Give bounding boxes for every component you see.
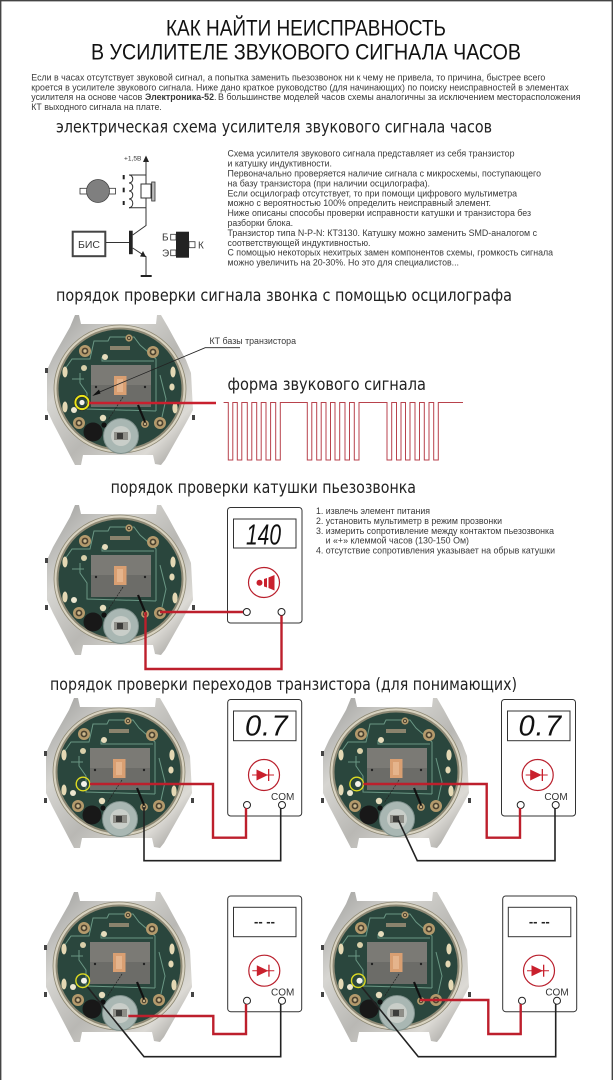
intro text block: . <box>214 92 216 102</box>
circuit description text: Ниже описаны способы проверки исправности катушки и транзистора без <box>228 208 531 218</box>
multimeter 0.7: . <box>536 711 544 743</box>
heading: coil check: порядок проверки катушки пьезозвонка <box>111 478 416 497</box>
title: КАК НАЙТИ НЕИСПРАВНОСТЬ <box>166 16 446 41</box>
multimeter no reading: COM <box>545 988 569 999</box>
watch 6 <box>321 892 471 1042</box>
heading: circuit diagram: электрическая схема усилителя звукового сигнала часов <box>56 118 492 137</box>
title: В УСИЛИТЕЛЕ ЗВУКОВОГО СИГНАЛА ЧАСОВ <box>91 39 521 64</box>
circuit schematic: Э <box>162 249 169 260</box>
circuit description text: на базу транзистора (при наличии осцилографа). <box>228 178 430 188</box>
panel: junction test bottom left <box>44 892 302 1057</box>
intro text block: КТ выходного сигнала на плате. <box>31 102 162 112</box>
circuit schematic: Б <box>162 233 169 244</box>
multimeter no reading <box>503 896 577 1012</box>
watch 4 <box>321 698 471 848</box>
coil check instructions: 1. извлечь элемент питания <box>316 506 430 516</box>
intro text block: кроется в усилителе звукового сигнала. Ниже дано краткое руководство (для начинающих) по поиску неисправностей в элементах <box>31 82 569 92</box>
coil check instructions: и «+» клеммой часов (130-150 Ом) <box>326 536 469 546</box>
panel: junction test bottom right <box>321 892 577 1057</box>
watch 5 <box>44 892 194 1042</box>
coil check instructions: 4. отсутствие сопротивления указывает на обрыв катушки <box>316 546 555 556</box>
test point <box>76 777 90 791</box>
circuit description text <box>228 149 553 268</box>
intro text block: Если в часах отсутствует звуковой сигнал, а попытка заменить пьезозвонок ни к чему не привела, то причина, быстрее всего <box>31 72 545 82</box>
red probe wire to waveform <box>89 402 216 404</box>
circuit description text: С помощью некоторых нехитрых замен компонентов схемы, громкость сигнала <box>228 248 553 258</box>
panel: junction test top right <box>321 698 576 861</box>
test point <box>352 974 365 988</box>
multimeter no reading: COM <box>271 988 294 999</box>
test point <box>350 777 364 791</box>
circuit description text: можно с вероятностью 100% определить неисправный элемент. <box>228 198 491 208</box>
intro text block: Электроника-52 <box>145 92 214 102</box>
circuit schematic: БИС <box>78 239 100 251</box>
multimeter 0.7: 0 <box>245 711 261 743</box>
multimeter 0.7: 0 <box>518 711 535 743</box>
multimeter no reading <box>228 896 302 1012</box>
circuit description text: соответствующей индуктивностью. <box>228 238 370 248</box>
heading: transistor junction check: порядок проверки переходов транзистора (для понимающих) <box>50 675 517 694</box>
multimeter 0.7: 7 <box>545 711 563 743</box>
intro text block: усилителя на основе часов <box>31 92 143 102</box>
probe wires <box>128 1004 246 1034</box>
probe wires: coil check <box>146 612 282 669</box>
probe wires <box>420 1000 521 1034</box>
multimeter 0.7 <box>228 700 302 816</box>
heading: waveform: форма звукового сигнала <box>228 375 426 394</box>
circuit schematic: +1,5В <box>124 156 142 163</box>
probe wires <box>363 784 520 838</box>
multimeter no reading: -- -- <box>529 914 550 929</box>
multimeter 0.7: COM <box>544 792 568 803</box>
title <box>91 16 521 64</box>
intro text block <box>31 72 581 112</box>
circuit description text: Первоначально проверяется наличие сигнала с микросхемы, поступающего <box>228 168 541 178</box>
circuit description text: Транзистор типа N-P-N: КТ3130. Катушку можно заменить SMD-аналогом с <box>228 228 538 238</box>
watch 1 with test point <box>45 315 195 465</box>
coil check instructions: 3. измерить сопротивление между контактом пьезозвонка <box>316 526 554 536</box>
multimeter: continuity 140 <box>228 508 302 623</box>
probe wires <box>90 784 246 838</box>
heading: oscilloscope check: порядок проверки сигнала звонка с помощью осцилографа <box>56 286 512 305</box>
callout: base test point: КТ базы транзистора <box>210 336 296 346</box>
intro text block: В большинстве моделей часов схемы аналогичны за исключением месторасположения <box>218 92 581 102</box>
multimeter 0.7: 7 <box>272 711 290 743</box>
watch 2 <box>45 505 195 655</box>
circuit description text: и катушку индуктивности. <box>228 159 332 169</box>
multimeter no reading: -- -- <box>254 914 275 929</box>
panel: junction test top left <box>44 698 302 861</box>
circuit description text: Схема усилителя звукового сигнала представляет из себя транзистор <box>228 149 515 159</box>
multimeter 0.7: . <box>262 711 270 743</box>
coil check instructions <box>316 506 555 556</box>
circuit description text: разборки блока. <box>228 218 293 228</box>
circuit schematic: К <box>198 240 204 252</box>
multimeter 0.7: COM <box>271 792 294 803</box>
multimeter 0.7 <box>502 700 576 816</box>
test point <box>76 974 89 988</box>
circuit description text: можно увеличить на 20-30%. Но это для специалистов... <box>228 258 459 268</box>
circuit description text: Если осцилограф отсутствует, то при помощи цифрового мультиметра <box>228 188 517 198</box>
coil check instructions: 2. установить мультиметр в режим прозвонки <box>316 516 502 526</box>
multimeter: continuity 140: 140 <box>246 520 281 552</box>
callout: base test point <box>92 336 296 396</box>
circuit schematic <box>73 156 204 277</box>
waveform chart <box>224 402 463 460</box>
watch 3 <box>44 698 194 848</box>
